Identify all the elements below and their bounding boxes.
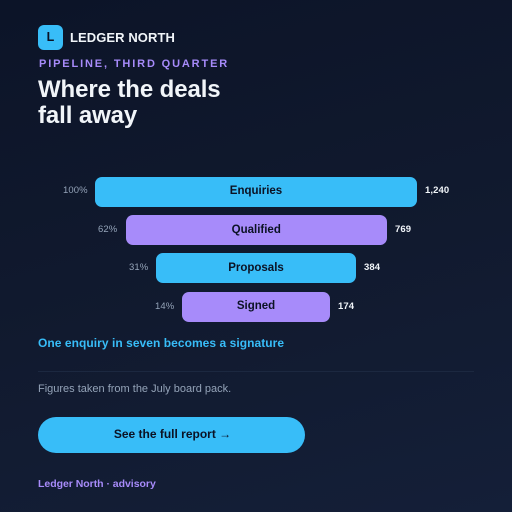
funnel chart xyxy=(63,177,449,322)
bar xyxy=(126,215,387,245)
title: fall away xyxy=(38,102,137,128)
percent: 62% xyxy=(98,224,117,235)
bar: Proposals xyxy=(228,262,284,274)
bar xyxy=(156,253,356,283)
logo mark: L xyxy=(47,30,54,44)
row: Enquiries xyxy=(63,177,449,207)
percent: 100% xyxy=(63,185,88,196)
eyebrow: PIPELINE, THIRD QUARTER xyxy=(39,58,229,70)
value: 1,240 xyxy=(425,185,449,196)
percent: 14% xyxy=(155,301,174,312)
title xyxy=(38,76,221,128)
bar: Signed xyxy=(237,300,275,312)
title: Where the deals xyxy=(38,76,221,103)
footer: Ledger North · advisory xyxy=(38,478,156,490)
bar: Enquiries xyxy=(230,185,282,197)
call to action button xyxy=(38,417,305,453)
value: 174 xyxy=(338,301,354,312)
bar: Qualified xyxy=(232,224,281,236)
value: 769 xyxy=(395,224,411,235)
bar xyxy=(95,177,417,207)
call to action button: See the full report → xyxy=(114,427,231,441)
bar xyxy=(182,292,330,322)
key takeaway: One enquiry in seven becomes a signature xyxy=(38,336,284,350)
row: Signed xyxy=(155,292,354,322)
percent: 31% xyxy=(129,262,148,273)
source note: Figures taken from the July board pack. xyxy=(38,383,231,395)
logo mark xyxy=(38,25,63,50)
value: 384 xyxy=(364,262,380,273)
row: Qualified xyxy=(98,215,411,245)
row: Proposals xyxy=(129,253,380,283)
brand name: LEDGER NORTH xyxy=(70,30,175,45)
